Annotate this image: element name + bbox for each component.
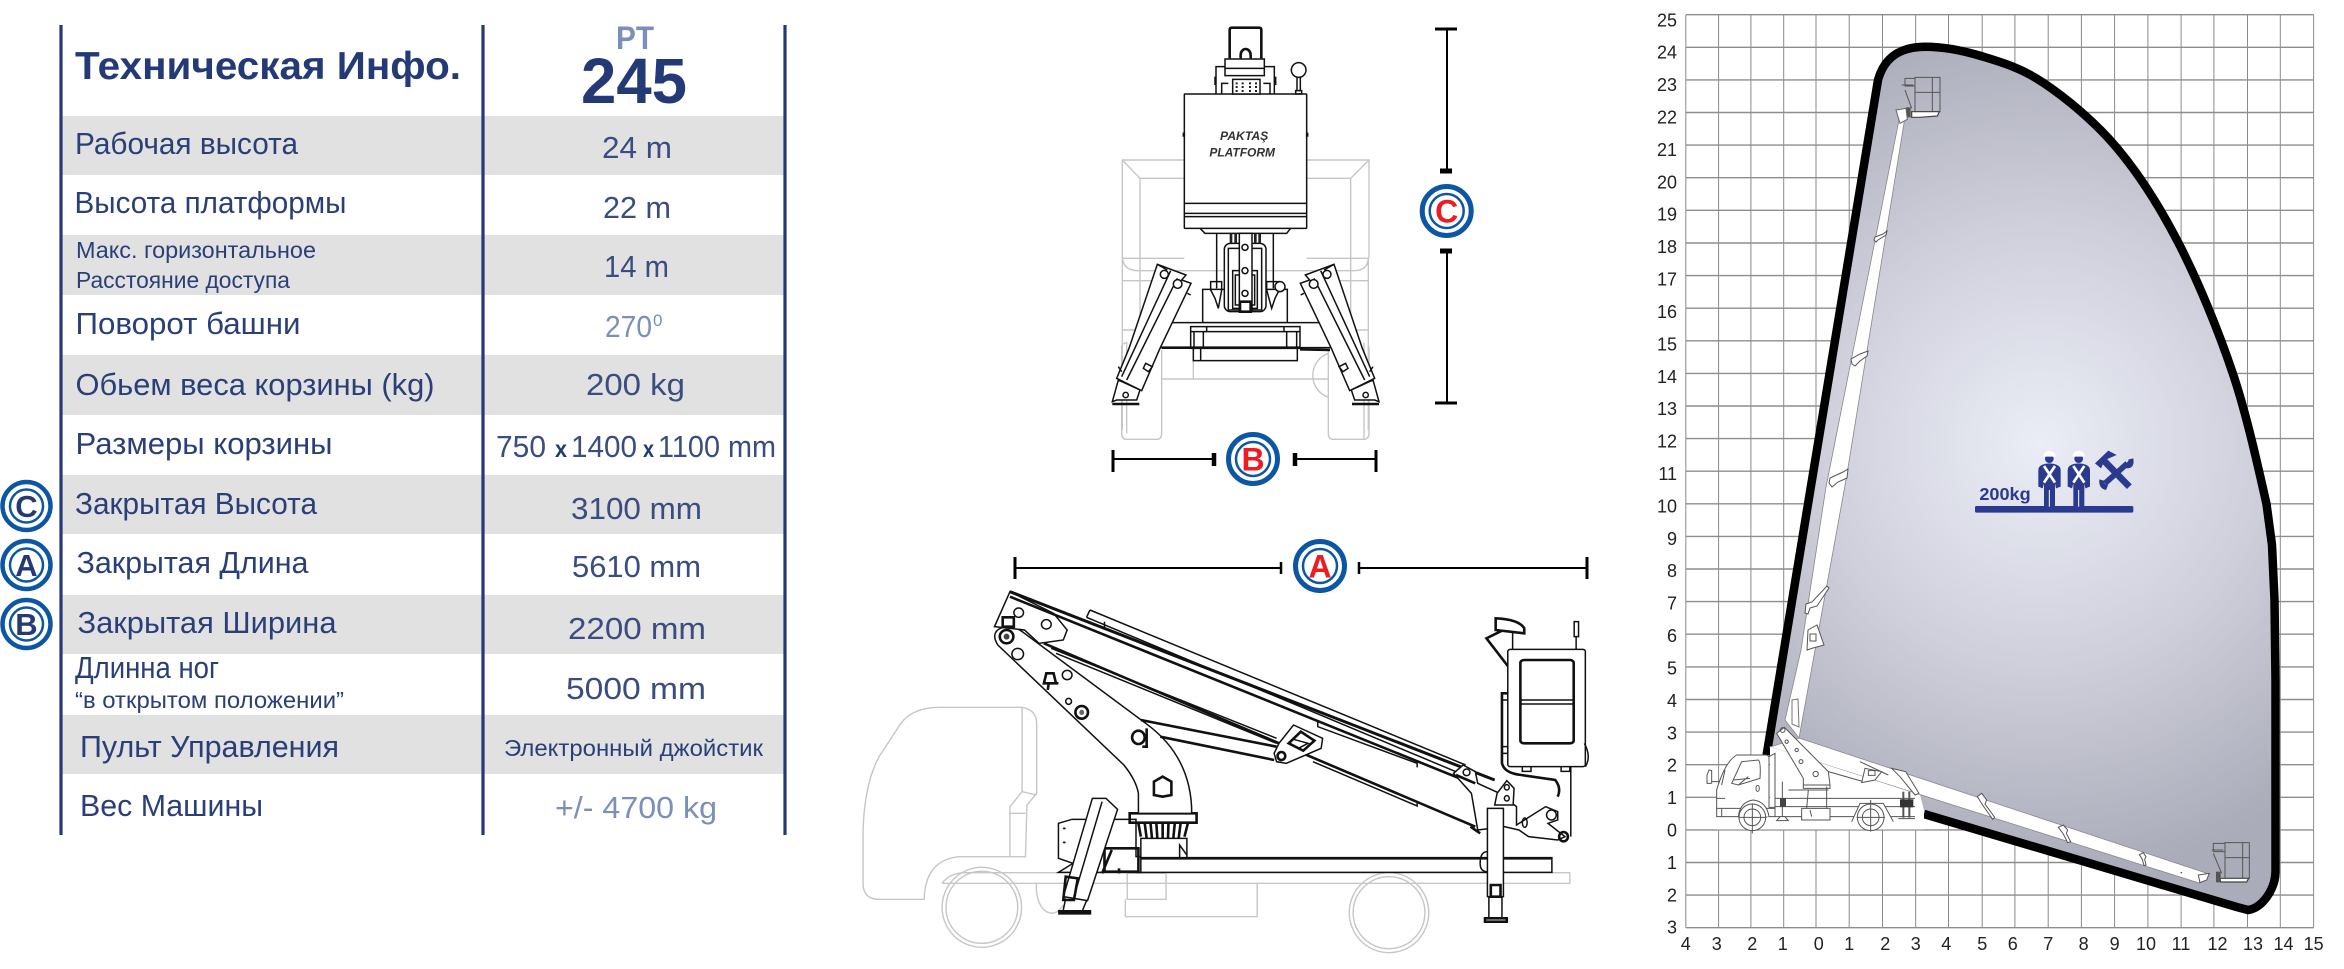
dimension line: C xyxy=(1435,29,1457,403)
row: basket dimensions: 1400 xyxy=(571,429,637,464)
y-axis labels: 11 xyxy=(1658,464,1677,484)
row: control panel xyxy=(62,715,785,774)
x-axis labels: 7 xyxy=(2043,934,2053,954)
x-axis labels: 14 xyxy=(2273,934,2294,954)
panel: technical specification table xyxy=(2,20,785,835)
basket brand text: PLATFORM xyxy=(1209,145,1276,159)
row: leg span: “в открытом положении” xyxy=(75,687,344,713)
worker 2 xyxy=(2068,451,2090,507)
row: platform height xyxy=(74,185,671,225)
row: basket dimensions: x xyxy=(643,436,654,462)
row: leg span: Длинна ног xyxy=(75,650,219,685)
model heading: PT 245: PT xyxy=(616,20,654,56)
row: working height: Рабочая высота xyxy=(75,126,299,161)
basket brand text: PAKTAŞ xyxy=(1220,129,1268,143)
badge: C dimension xyxy=(1422,186,1471,236)
x-axis labels: 1 xyxy=(1778,934,1788,954)
boom connector xyxy=(1274,725,1323,763)
x-axis labels: 3 xyxy=(1911,934,1921,954)
y-axis labels: 23 xyxy=(1657,75,1677,95)
panel: working range chart xyxy=(1657,10,2324,954)
y-axis labels: 4 xyxy=(1667,691,1677,711)
row: turret rotation: Поворот башни xyxy=(76,306,300,341)
chart horizontal grid xyxy=(1686,15,2314,928)
operator basket xyxy=(1183,94,1308,233)
x-axis labels: 1 xyxy=(1844,934,1854,954)
right outrigger leg xyxy=(1300,264,1379,404)
badge: C dimension: C xyxy=(1435,194,1458,230)
badge: B dimension xyxy=(1228,434,1278,484)
y-axis labels: 7 xyxy=(1667,594,1677,614)
outrigger front xyxy=(1059,798,1118,913)
reach envelope xyxy=(1767,47,2276,910)
row: max horizontal reach xyxy=(62,235,785,295)
x-axis labels: 5 xyxy=(1977,934,1987,954)
upper boom xyxy=(994,592,1495,787)
badge: A dimension xyxy=(1296,542,1344,590)
row: closed width: Закрытая Ширина xyxy=(78,605,337,640)
boom tip bracket xyxy=(1453,765,1568,841)
boom column xyxy=(1203,233,1287,323)
row: machine weight xyxy=(80,788,717,825)
table heading: Техническая Инфо.: Техническая Инфо. xyxy=(75,45,461,88)
y-axis labels: 24 xyxy=(1657,43,1677,63)
row: basket capacity: Обьем веса корзины (kg) xyxy=(76,367,434,402)
x-axis labels: 15 xyxy=(2304,934,2324,954)
badge: B: B xyxy=(15,607,38,642)
articulated lower arm xyxy=(995,627,1192,813)
top controls and lever xyxy=(1215,28,1306,94)
row: working height xyxy=(62,116,785,175)
y-axis labels: 25 xyxy=(1657,10,1677,30)
row: basket dimensions: x xyxy=(555,436,567,462)
chassis beam xyxy=(1058,819,1552,873)
row: control panel: Пульт Управления xyxy=(80,729,339,764)
y-axis labels: 3 xyxy=(1667,723,1677,743)
x-axis labels: 6 xyxy=(2008,934,2018,954)
badge: B dimension: B xyxy=(1241,442,1265,478)
chart grid xyxy=(1686,15,2314,928)
outrigger rear xyxy=(1480,808,1507,922)
model heading: PT 245: 245 xyxy=(581,45,687,117)
x-axis labels: 0 xyxy=(1814,934,1824,954)
row: max horizontal reach: Расстояние доступа xyxy=(76,267,291,293)
basket brand text xyxy=(1209,129,1276,159)
outrigger base xyxy=(1153,323,1338,361)
row: basket dimensions: 1100 mm xyxy=(658,429,776,464)
row: closed height: 3100 mm xyxy=(571,491,702,526)
x-axis labels xyxy=(1681,934,2324,954)
y-axis labels: 19 xyxy=(1657,205,1677,225)
capacity label: 200kg xyxy=(1979,484,2031,504)
row: basket dimensions: Размеры корзины xyxy=(76,426,332,461)
row: closed length: Закрытая Длина xyxy=(76,545,309,580)
truck outline (grey) xyxy=(863,707,1570,953)
upper boom (white) xyxy=(1785,117,1905,738)
y-axis labels: 8 xyxy=(1667,561,1677,581)
row: turret rotation xyxy=(76,306,662,344)
x-axis labels: 4 xyxy=(1681,934,1691,954)
envelope outline xyxy=(1767,47,2276,910)
y-axis labels: 22 xyxy=(1657,108,1677,128)
row: closed length xyxy=(76,545,701,584)
x-axis labels: 3 xyxy=(1712,934,1722,954)
load icon: 200kg, two workers and tools xyxy=(1975,451,2134,513)
row: turret rotation: 0 xyxy=(653,311,662,330)
small truck boom arm xyxy=(1777,727,1830,785)
x-axis labels: 12 xyxy=(2207,934,2228,954)
row: max horizontal reach: Макс. горизонтальное xyxy=(76,237,316,263)
dimension line: B xyxy=(1113,450,1376,472)
y-axis labels: 9 xyxy=(1667,529,1677,549)
y-axis labels: 1 xyxy=(1667,853,1677,873)
y-axis labels: 17 xyxy=(1657,270,1677,290)
lower boom links and elbow xyxy=(1977,793,2249,883)
y-axis labels: 5 xyxy=(1667,658,1677,678)
y-axis labels: 2 xyxy=(1667,885,1677,905)
y-axis labels: 13 xyxy=(1657,399,1677,419)
tools xyxy=(2095,451,2134,490)
badge: A dimension: A xyxy=(1308,548,1332,584)
x-axis labels: 11 xyxy=(2172,934,2190,954)
badge: C xyxy=(2,482,50,530)
y-axis labels: 3 xyxy=(1667,918,1677,938)
y-axis labels: 14 xyxy=(1657,367,1677,387)
row: leg span xyxy=(75,650,706,713)
y-axis labels: 20 xyxy=(1657,172,1677,192)
row: closed height xyxy=(62,475,785,534)
y-axis labels: 16 xyxy=(1657,302,1677,322)
y-axis labels: 12 xyxy=(1657,432,1677,452)
x-axis labels: 2 xyxy=(1880,934,1890,954)
panel: rear view drawing xyxy=(1112,28,1379,439)
x-axis labels: 9 xyxy=(2110,934,2120,954)
row: working height: 24 m xyxy=(602,130,672,165)
truck outline (grey) xyxy=(1122,160,1369,439)
row: closed width: 2200 mm xyxy=(568,611,706,646)
badge: C: C xyxy=(15,489,38,524)
lower boom (white) xyxy=(1770,738,2206,883)
badge: A xyxy=(2,541,50,589)
y-axis labels: 6 xyxy=(1667,626,1677,646)
x-axis labels: 4 xyxy=(1941,934,1951,954)
row: closed length: 5610 mm xyxy=(572,549,701,584)
x-axis labels: 8 xyxy=(2079,934,2089,954)
basket side view xyxy=(1486,618,1588,837)
y-axis labels: 15 xyxy=(1657,334,1677,354)
turret base xyxy=(1130,813,1197,858)
y-axis labels: 0 xyxy=(1667,820,1677,840)
row: basket dimensions xyxy=(76,426,776,464)
row: leg span: 5000 mm xyxy=(566,671,706,706)
top basket on chart xyxy=(1896,77,1940,123)
left outrigger leg xyxy=(1112,264,1191,404)
row: turret rotation: 270 xyxy=(605,309,652,344)
parallel link xyxy=(1044,643,1475,827)
worker 1 xyxy=(2038,451,2061,507)
x-axis labels: 13 xyxy=(2243,934,2263,954)
x-axis labels: 2 xyxy=(1747,934,1757,954)
row: control panel: Электронный джойстик xyxy=(504,735,764,761)
base bar xyxy=(1975,506,2133,513)
badge: B xyxy=(2,600,50,648)
row: basket capacity: 200 kg xyxy=(586,367,685,402)
y-axis labels: 1 xyxy=(1667,788,1677,808)
row: machine weight: +/- 4700 kg xyxy=(555,790,717,825)
badge: A: A xyxy=(15,548,38,583)
row: platform height: 22 m xyxy=(603,190,671,225)
x-axis labels: 10 xyxy=(2136,934,2156,954)
row: closed height: Закрытая Высота xyxy=(75,486,318,521)
row: platform height: Высота платформы xyxy=(74,185,346,220)
panel: side view drawing xyxy=(863,592,1588,953)
small truck on chart xyxy=(1707,727,1924,833)
y-axis labels: 18 xyxy=(1657,237,1677,257)
y-axis labels: 2 xyxy=(1667,756,1677,776)
y-axis labels: 10 xyxy=(1657,496,1677,516)
row: basket dimensions: 750 xyxy=(496,429,546,464)
y-axis labels xyxy=(1657,10,1677,938)
y-axis labels: 21 xyxy=(1657,140,1677,160)
dimension line: A xyxy=(1015,557,1587,579)
row: machine weight: Вес Машины xyxy=(80,788,263,823)
row: max horizontal reach: 14 m xyxy=(604,249,669,284)
row: basket capacity xyxy=(62,355,785,415)
row: closed width xyxy=(62,595,785,654)
